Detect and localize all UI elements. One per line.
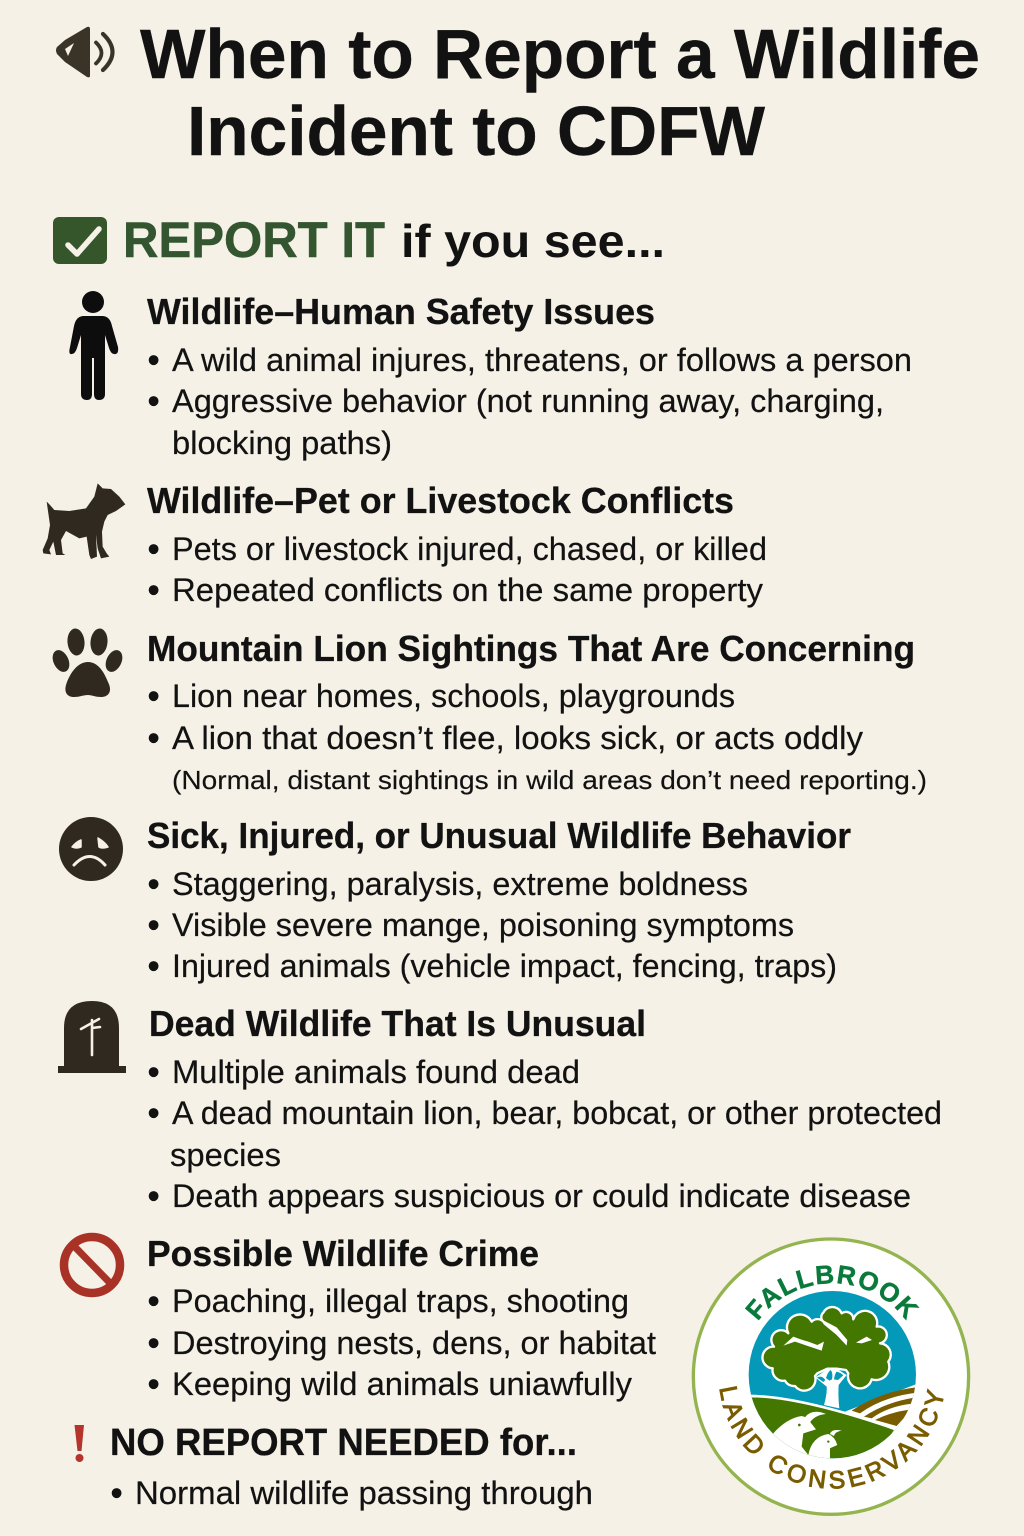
title: Incident to CDFW bbox=[187, 92, 765, 170]
icon: sad face bbox=[59, 817, 123, 881]
section: mountain lion sightings bbox=[49, 628, 927, 795]
bullet list: • bbox=[148, 1178, 159, 1214]
bullet list: Normal wildlife passing through bbox=[135, 1475, 593, 1511]
bullet list: A wild animal injures, threatens, or follows a person bbox=[172, 342, 912, 378]
bullet list: Repeated conflicts on the same property bbox=[172, 572, 763, 608]
bullet list: • bbox=[148, 1054, 159, 1090]
heading: report it if you see: REPORT IT bbox=[123, 212, 385, 268]
bullet list: A dead mountain lion, bear, bobcat, or other protected bbox=[172, 1095, 942, 1131]
logo emblem bbox=[747, 1290, 920, 1463]
bullet list: blocking paths) bbox=[172, 425, 392, 461]
bullet list bbox=[148, 531, 767, 608]
section: possible wildlife crime bbox=[64, 1233, 656, 1402]
heading: report it if you see: if you see... bbox=[401, 215, 665, 267]
bullet list: Poaching, illegal traps, shooting bbox=[172, 1283, 629, 1319]
bullet list: • bbox=[148, 342, 159, 378]
icon: red exclamation bbox=[74, 1425, 84, 1462]
section heading: Mountain Lion Sightings That Are Concerning bbox=[147, 628, 915, 669]
section heading: Wildlife–Human Safety Issues bbox=[147, 291, 655, 332]
bullet list: Injured animals (vehicle impact, fencing, traps) bbox=[172, 948, 837, 984]
bullet list: Keeping wild animals uniawfully bbox=[172, 1366, 632, 1402]
title bbox=[140, 15, 980, 170]
bullet list: • bbox=[148, 1325, 159, 1361]
bullet list: • bbox=[148, 383, 159, 419]
bullet list: • bbox=[148, 907, 159, 943]
quail bbox=[773, 1412, 842, 1458]
bullet list: • bbox=[148, 948, 159, 984]
tree canopy bbox=[762, 1307, 891, 1391]
bullet list: • bbox=[148, 678, 159, 714]
bullet list bbox=[148, 866, 837, 984]
section heading: Dead Wildlife That Is Unusual bbox=[149, 1003, 646, 1044]
icon: speaker bbox=[56, 27, 112, 77]
bullet list: • bbox=[148, 866, 159, 902]
bullet list: Aggressive behavior (not running away, charging, bbox=[172, 383, 884, 419]
icon: prohibited sign bbox=[64, 1237, 120, 1293]
bullet list bbox=[148, 1054, 942, 1214]
section heading: NO REPORT NEEDED for... bbox=[110, 1422, 577, 1464]
bullet list: species bbox=[170, 1137, 281, 1173]
section: sick, injured or unusual behavior bbox=[59, 815, 851, 984]
bullet list: Visible severe mange, poisoning symptoms bbox=[172, 907, 794, 943]
icon: dog bbox=[43, 483, 125, 559]
field furrows bbox=[845, 1384, 917, 1433]
hill bbox=[747, 1396, 896, 1463]
section heading: Sick, Injured, or Unusual Wildlife Behavior bbox=[147, 815, 851, 856]
icon: tombstone bbox=[58, 1001, 126, 1073]
bullet list: • bbox=[148, 720, 159, 756]
bullet list: Death appears suspicious or could indicate disease bbox=[172, 1178, 911, 1214]
bullet list: • bbox=[148, 1366, 159, 1402]
section heading: Wildlife–Pet or Livestock Conflicts bbox=[147, 480, 734, 521]
bullet list bbox=[148, 342, 912, 461]
bullet list: • bbox=[148, 531, 159, 567]
section: no report needed bbox=[74, 1422, 593, 1511]
icon: green check box bbox=[53, 217, 107, 264]
bullet list: • bbox=[148, 572, 159, 608]
bullet list: Destroying nests, dens, or habitat bbox=[172, 1325, 656, 1361]
logo: Fallbrook Land Conservancy bbox=[692, 1237, 970, 1516]
title: When to Report a Wildlife bbox=[140, 15, 980, 93]
heading: report it if you see bbox=[123, 212, 665, 268]
bullet list: Lion near homes, schools, playgrounds bbox=[172, 678, 735, 714]
bullet list: • bbox=[148, 1283, 159, 1319]
bullet list: A lion that doesn’t flee, looks sick, or acts oddly bbox=[172, 720, 863, 756]
bullet list: • bbox=[111, 1475, 122, 1511]
section: wildlife-pet or livestock conflicts bbox=[43, 480, 767, 608]
section: wildlife-human safety issues bbox=[69, 291, 912, 461]
bullet list: Multiple animals found dead bbox=[172, 1054, 580, 1090]
logo text: Land Conservancy: LAND CONSERVANCY bbox=[719, 1386, 944, 1489]
icon: person bbox=[69, 291, 118, 400]
bullet list bbox=[148, 678, 863, 756]
section: dead wildlife that is unusual bbox=[58, 1001, 942, 1214]
bullet list: • bbox=[148, 1095, 159, 1131]
icon: paw print bbox=[49, 628, 126, 697]
bullet list: Pets or livestock injured, chased, or killed bbox=[172, 531, 767, 567]
logo text: Fallbrook: FALLBROOK bbox=[744, 1265, 920, 1321]
logo ring bbox=[693, 1239, 969, 1514]
section heading: Possible Wildlife Crime bbox=[147, 1233, 539, 1274]
note: (Normal, distant sightings in wild areas don’t need reporting.) bbox=[172, 765, 927, 795]
bullet list bbox=[148, 1283, 656, 1402]
bullet list: Staggering, paralysis, extreme boldness bbox=[172, 866, 748, 902]
tree trunk bbox=[815, 1369, 847, 1408]
